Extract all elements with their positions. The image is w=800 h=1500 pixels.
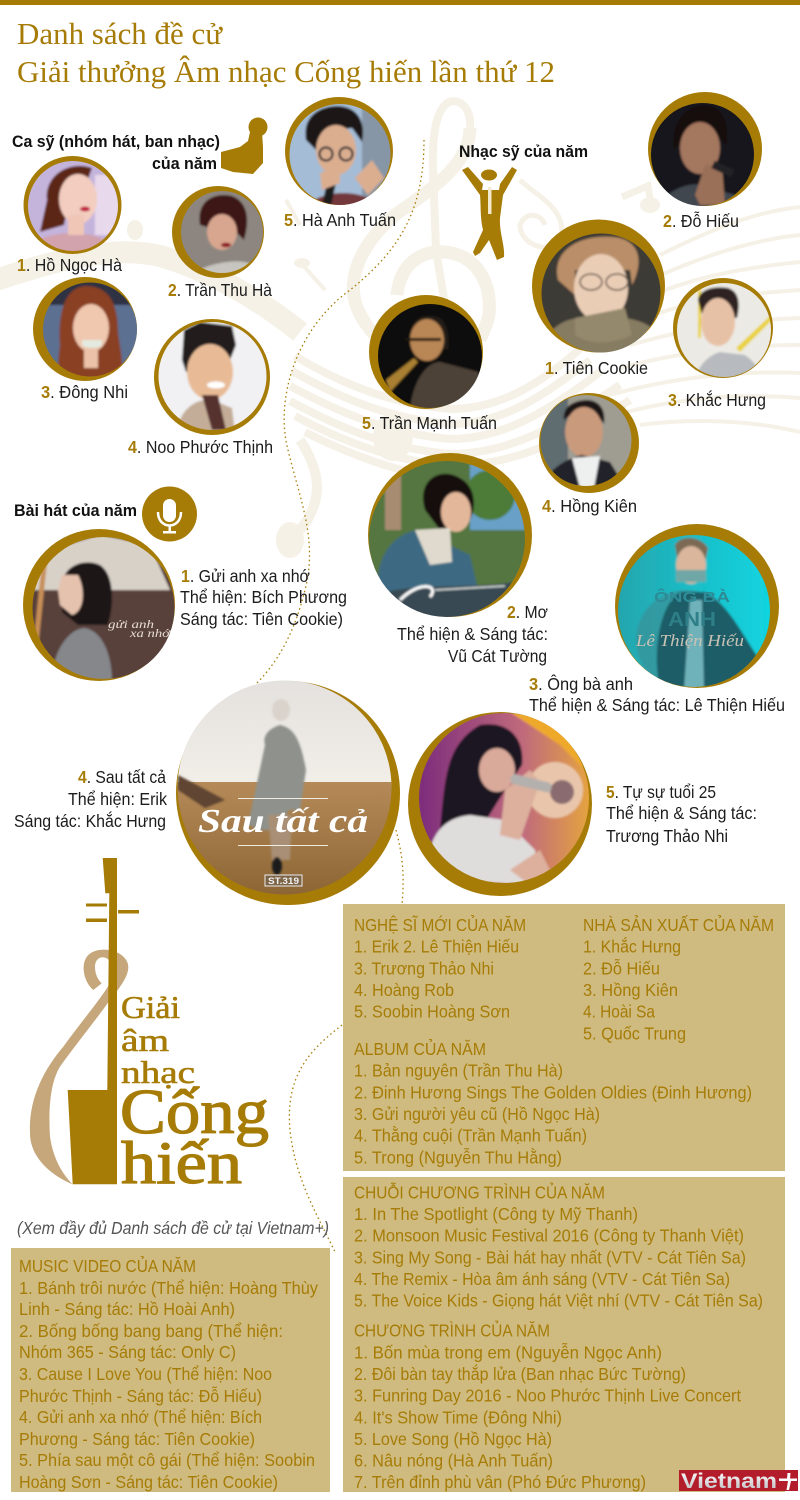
- panel: new artist, producer, album of the year: 3. Gửi người yêu cũ (Hồ Ngọc Hà): [354, 1104, 600, 1124]
- label: Trần Mạnh Tuấn: 5. Trần Mạnh Tuấn: [362, 413, 497, 433]
- portrait: Đông Nhi: [33, 277, 140, 381]
- label: Gửi anh xa nhớ: [180, 566, 347, 629]
- panel: new artist, producer, album of the year: 5. Soobin Hoàng Sơn: [354, 1002, 510, 1022]
- album: Sau tất cả: Sau tất cả: [198, 803, 368, 840]
- icon: microphone badge: [142, 486, 197, 542]
- heading: song of the year: Bài hát của năm: [14, 502, 137, 520]
- panel: new artist, producer, album of the year: 1. Bản nguyên (Trần Thu Hà): [354, 1061, 563, 1081]
- label: Gửi anh xa nhớ: Thể hiện: Bích Phương: [180, 587, 347, 607]
- icon: hand holding microphone: [221, 118, 268, 174]
- label: Ông bà anh: 3. Ông bà anh: [529, 673, 633, 694]
- panel: new artist, producer, album of the year: NGHỆ SĨ MỚI CỦA NĂM: [354, 914, 526, 935]
- title: Danh sách đề cử: [17, 16, 223, 51]
- panel: new artist, producer, album of the year: 3. Trương Thảo Nhi: [354, 958, 494, 978]
- portrait: Đỗ Hiếu: [648, 92, 762, 210]
- album: Sau tất cả: [175, 678, 400, 905]
- heading: singer of the year: Ca sỹ (nhóm hát, ban nhạc): [12, 133, 220, 151]
- heading: singer of the year: của năm: [152, 155, 217, 173]
- label: Gửi anh xa nhớ: 1. Gửi anh xa nhớ: [181, 566, 310, 586]
- panel: music video of the year: 5. Phía sau một cô gái (Thể hiện: Soobin: [19, 1450, 315, 1470]
- label: Mơ: [397, 602, 548, 666]
- panel: new artist, producer, album of the year: 4. Hoàng Rob: [354, 980, 454, 1000]
- logo icon: instrument: [30, 858, 139, 1184]
- title: Giải thưởng Âm nhạc Cống hiến lần thứ 12: [17, 54, 555, 89]
- label: Sau tất cả: Sáng tác: Khắc Hưng: [14, 810, 166, 831]
- panel: new artist, producer, album of the year: 4. Thằng cuội (Trần Mạnh Tuấn): [354, 1125, 587, 1146]
- panel: new artist, producer, album of the year: [343, 904, 785, 1171]
- label: Mơ: 2. Mơ: [507, 602, 548, 622]
- panel: programme series and programme of the year: 7. Trên đỉnh phù vân (Phó Đức Phương): [354, 1472, 646, 1492]
- heading: singer of the year: [12, 133, 220, 173]
- album: Ông bà anh: Lê Thiện Hiếu: [635, 631, 744, 650]
- logo wordmark: âm: [121, 1022, 169, 1058]
- logo wordmark: nhạc: [121, 1054, 195, 1090]
- label: Sau tất cả: Thể hiện: Erik: [68, 789, 167, 809]
- dotted connector lines: [255, 140, 424, 1252]
- panel: programme series and programme of the year: 2. Đôi bàn tay thắp lửa (Ban nhạc Bức Tường): [354, 1363, 686, 1384]
- label: Tiên Cookie: 1. Tiên Cookie: [545, 358, 648, 378]
- panel: new artist, producer, album of the year: 2. Đỗ Hiếu: [583, 957, 660, 978]
- panel: new artist, producer, album of the year: NHÀ SẢN XUẤT CỦA NĂM: [583, 914, 774, 935]
- panel: music video of the year: 2. Bống bống bang bang (Thể hiện:: [19, 1321, 283, 1341]
- panel: new artist, producer, album of the year: 2. Đinh Hương Sings The Golden Oldies (Đinh Hương): [354, 1082, 752, 1102]
- title: [17, 16, 555, 89]
- label: Trần Thu Hà: 2. Trần Thu Hà: [168, 280, 272, 300]
- portrait: Trần Mạnh Tuấn: [369, 295, 487, 412]
- panel: programme series and programme of the year: 4. The Remix - Hòa âm ánh sáng (VTV - Cát Tiên Sa): [354, 1269, 730, 1289]
- logo: Vietnam+: [679, 1470, 798, 1493]
- portrait: Khắc Hưng: [673, 278, 775, 380]
- label: Noo Phước Thịnh: 4. Noo Phước Thịnh: [128, 437, 273, 457]
- panel: music video of the year: 1. Bánh trôi nước (Thể hiện: Hoàng Thùy: [19, 1278, 318, 1298]
- panel: new artist, producer, album of the year: 1. Khắc Hưng: [583, 936, 681, 957]
- top bar: [0, 0, 800, 5]
- label: Sau tất cả: [14, 767, 167, 831]
- panel: programme series and programme of the year: CHƯƠNG TRÌNH CỦA NĂM: [354, 1320, 550, 1341]
- panel: programme series and programme of the year: 4. It's Show Time (Đông Nhi): [354, 1407, 562, 1427]
- label: Gửi anh xa nhớ: Sáng tác: Tiên Cookie): [180, 609, 343, 629]
- panel: programme series and programme of the year: CHUỖI CHƯƠNG TRÌNH CỦA NĂM: [354, 1182, 605, 1202]
- logo wordmark: Giải: [121, 989, 180, 1025]
- label: Ông bà anh: [529, 673, 785, 715]
- portrait: Trần Thu Hà: [172, 186, 268, 280]
- heading: songwriter of the year: Nhạc sỹ của năm: [459, 143, 588, 161]
- panel: music video of the year: [11, 1248, 330, 1492]
- panel: music video of the year: Nhóm 365 - Sáng tác: Only C): [19, 1342, 236, 1362]
- album: Gửi anh xa nhớ: gửi anh: [108, 617, 154, 631]
- label: Tự sự tuổi 25: Trương Thảo Nhi: [606, 826, 728, 846]
- album: Ông bà anh: ANH: [668, 609, 716, 631]
- panel: music video of the year: Hoàng Sơn - Sáng tác: Tiên Cookie): [19, 1472, 278, 1492]
- album: Ông bà anh: ÔNG BÀ: [654, 588, 730, 606]
- panel: programme series and programme of the year: 2. Monsoon Music Festival 2016 (Công ty Thanh Việt): [354, 1226, 744, 1246]
- label: Mơ: Thể hiện & Sáng tác:: [397, 624, 548, 644]
- panel: new artist, producer, album of the year: 5. Trong (Nguyễn Thu Hằng): [354, 1146, 562, 1167]
- panel: music video of the year: Phước Thịnh - Sáng tác: Đỗ Hiếu): [19, 1385, 262, 1406]
- panel: music video of the year: MUSIC VIDEO CỦA NĂM: [19, 1255, 196, 1276]
- label: Hồ Ngọc Hà: 1. Hồ Ngọc Hà: [17, 255, 122, 275]
- panel: programme series and programme of the year: 5. Love Song (Hồ Ngọc Hà): [354, 1429, 552, 1449]
- logo wordmark: Cống: [120, 1077, 269, 1147]
- panel: new artist, producer, album of the year: 4. Hoài Sa: [583, 1002, 655, 1022]
- panel: new artist, producer, album of the year: 3. Hồng Kiên: [583, 980, 678, 1000]
- label: Hà Anh Tuấn: 5. Hà Anh Tuấn: [284, 210, 396, 230]
- label: Tự sự tuổi 25: Thể hiện & Sáng tác:: [606, 803, 757, 823]
- album: Mơ: [365, 453, 532, 623]
- logo wordmark: [120, 989, 269, 1196]
- label: Đỗ Hiếu: 2. Đỗ Hiếu: [663, 210, 739, 231]
- label: Ông bà anh: Thể hiện & Sáng tác: Lê Thiện Hiếu: [529, 695, 785, 715]
- label: Mơ: Vũ Cát Tường: [448, 646, 547, 666]
- panel: new artist, producer, album of the year: 5. Quốc Trung: [583, 1023, 686, 1043]
- label: Tự sự tuổi 25: 5. Tự sự tuổi 25: [606, 782, 716, 802]
- panel: new artist, producer, album of the year: 1. Erik 2. Lê Thiện Hiếu: [354, 937, 519, 957]
- portrait: Hồng Kiên: [538, 393, 639, 493]
- panel: programme series and programme of the year: 5. The Voice Kids - Giọng hát Việt nhí (VTV - Cát Tiên Sa): [354, 1290, 763, 1310]
- label: Đông Nhi: 3. Đông Nhi: [41, 382, 128, 402]
- panel: new artist, producer, album of the year: ALBUM CỦA NĂM: [354, 1038, 486, 1059]
- panel: music video of the year: Phương - Sáng tác: Tiên Cookie): [19, 1429, 255, 1449]
- logo: Giải âm nhạc Cống hiến: [30, 858, 269, 1196]
- portrait: Hồ Ngọc Hà: [24, 156, 125, 255]
- album: Gửi anh xa nhớ: xa nhớ: [129, 626, 171, 640]
- album: Gửi anh xa nhớ: [23, 529, 180, 685]
- note: see full list: (Xem đầy đủ Danh sách đề cử tại Vietnam+): [17, 1218, 329, 1238]
- panel: programme series and programme of the year: 6. Nâu nóng (Hà Anh Tuấn): [354, 1451, 553, 1471]
- panel: programme series and programme of the year: [343, 1177, 785, 1492]
- panel: music video of the year: 3. Cause I Love You (Thể hiện: Noo: [19, 1364, 272, 1384]
- panel: programme series and programme of the year: 3. Funring Day 2016 - Noo Phước Thịnh Live Concert: [354, 1386, 741, 1406]
- portrait: Hà Anh Tuấn: [285, 97, 393, 210]
- portrait: Noo Phước Thịnh: [154, 319, 270, 435]
- background: music notes and staff: [0, 101, 800, 530]
- label: Sau tất cả: 4. Sau tất cả: [78, 767, 166, 787]
- label: Hồng Kiên: 4. Hồng Kiên: [542, 496, 637, 516]
- panel: programme series and programme of the year: 3. Sing My Song - Bài hát hay nhất (VTV - Cát Tiên Sa): [354, 1247, 746, 1267]
- panel: programme series and programme of the year: 1. Bốn mùa trong em (Nguyễn Ngọc Anh): [354, 1341, 662, 1362]
- label: Khắc Hưng: 3. Khắc Hưng: [668, 389, 766, 410]
- icon: composer figure: [462, 167, 517, 260]
- album: Ông bà anh: [615, 524, 779, 690]
- panel: music video of the year: Linh - Sáng tác: Hồ Hoài Anh): [19, 1299, 235, 1319]
- logo: Vietnam+: Vietnam: [681, 1470, 777, 1493]
- panel: programme series and programme of the year: 1. In The Spotlight (Công ty Mỹ Thanh): [354, 1204, 638, 1224]
- portrait: Tiên Cookie: [532, 220, 665, 357]
- album: Tự sự tuổi 25: [408, 710, 595, 896]
- album: Sau tất cả: ST.319: [268, 876, 299, 886]
- panel: music video of the year: 4. Gửi anh xa nhớ (Thể hiện: Bích: [19, 1407, 262, 1427]
- logo wordmark: hiến: [121, 1130, 242, 1196]
- background: note heads: [127, 197, 660, 558]
- label: Tự sự tuổi 25: [606, 782, 757, 846]
